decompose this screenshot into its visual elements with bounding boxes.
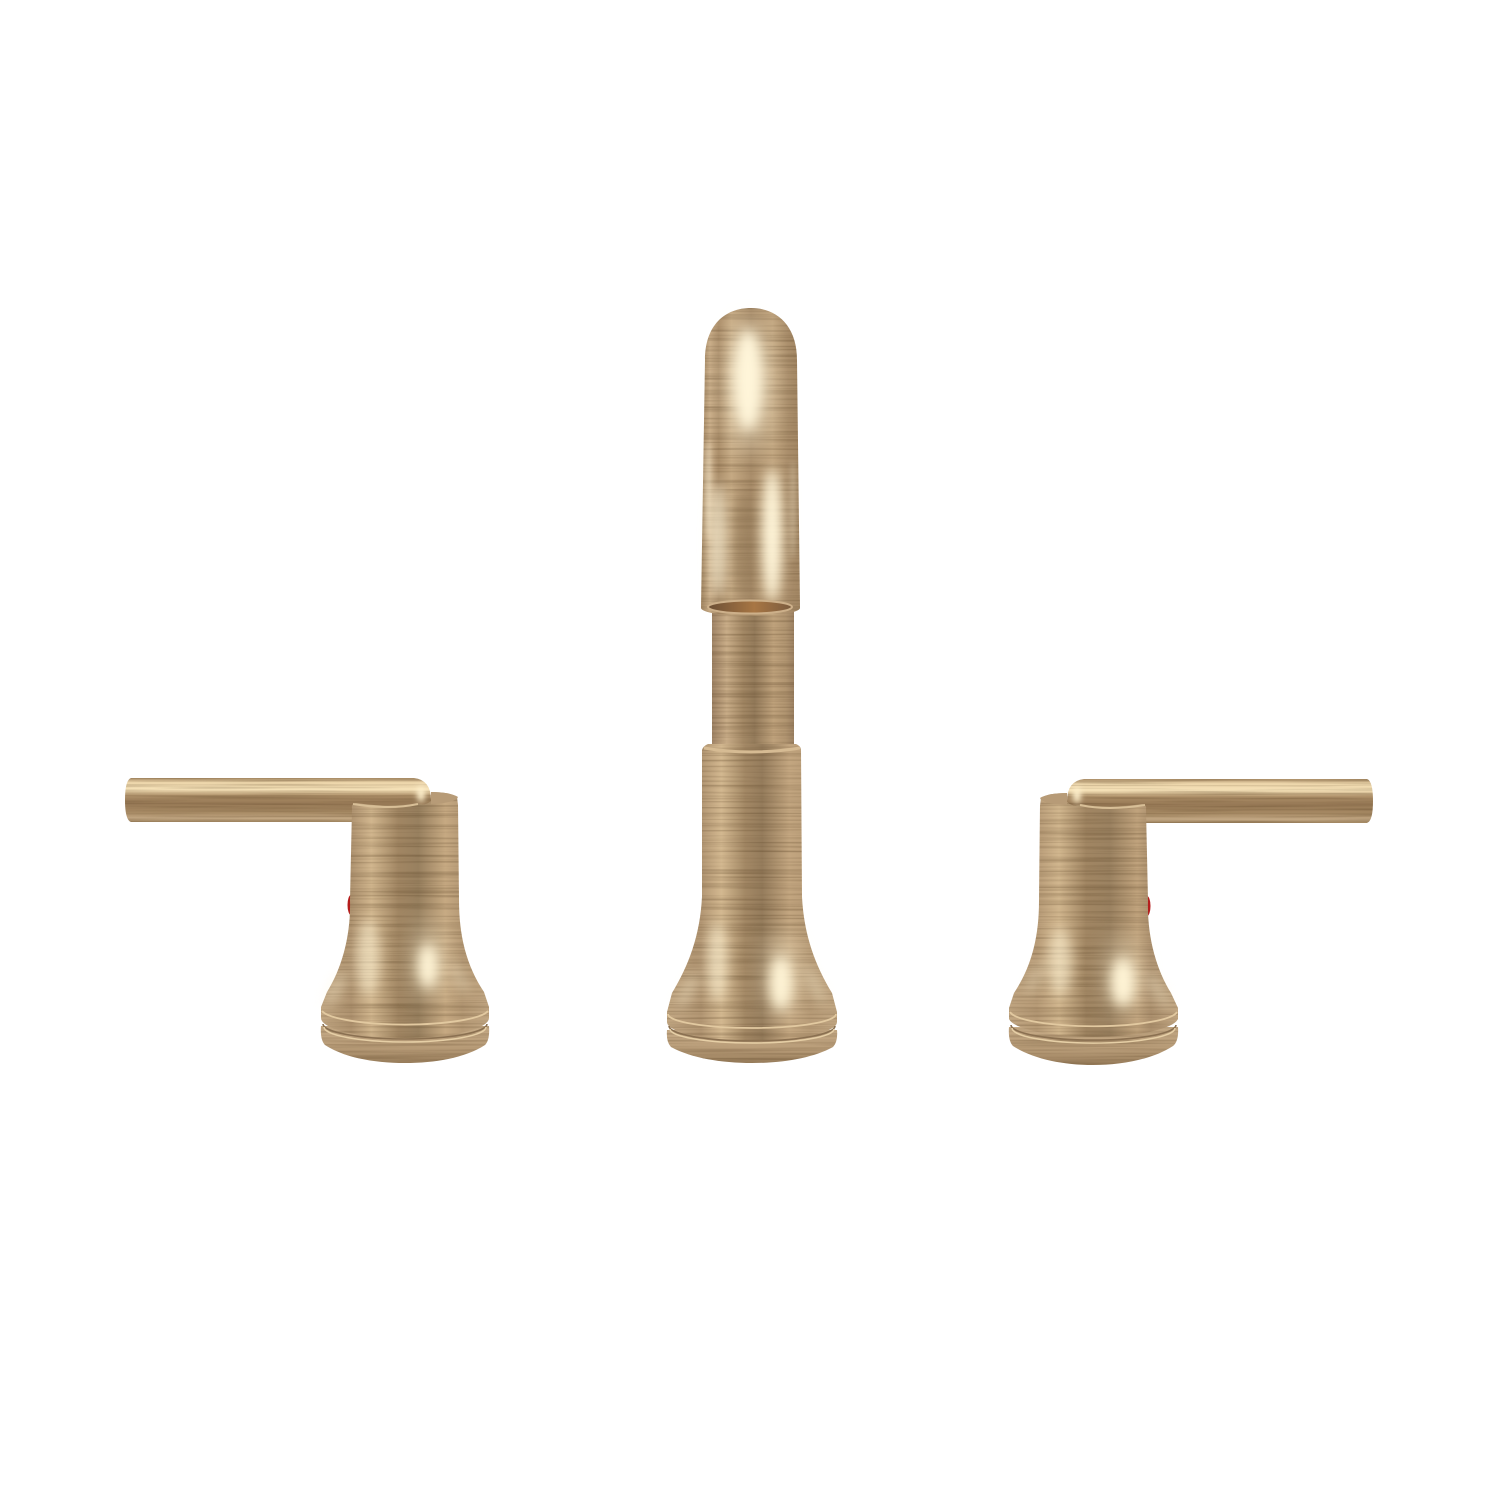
- spout lower shadow: [732, 490, 758, 600]
- left lever: [125, 778, 431, 822]
- right handle metal: [1009, 779, 1373, 1065]
- right lever: [1067, 779, 1373, 823]
- right handle ring lines: [1010, 1012, 1177, 1043]
- left handle metal: [125, 778, 489, 1063]
- curved spout: [701, 308, 800, 616]
- right handle top edge: [1080, 805, 1145, 808]
- spout highlights: [705, 319, 796, 601]
- left lever knob glint: [417, 786, 425, 802]
- left handle: [125, 778, 489, 1063]
- base ring lines: [668, 1014, 836, 1043]
- base stem: [667, 744, 837, 1041]
- left handle top disc: [431, 792, 458, 804]
- left handle top edge: [353, 804, 418, 807]
- right handle hot indicator: [1144, 896, 1150, 916]
- center spout assembly: [667, 308, 837, 1063]
- neck tube: [712, 606, 794, 750]
- spout collar top: [704, 748, 800, 752]
- right handle body: [1009, 793, 1178, 1037]
- left handle lower ring: [321, 1026, 489, 1063]
- right handle top disc: [1040, 793, 1067, 805]
- left handle highlights: [321, 920, 472, 1008]
- right handle lower ring: [1009, 1027, 1178, 1065]
- right lever knob glint: [1073, 787, 1081, 803]
- base highlights: [673, 922, 830, 1017]
- right handle highlights: [1023, 928, 1173, 1013]
- left handle body: [321, 792, 489, 1038]
- spout lower base ring: [667, 1030, 837, 1063]
- spout outlet opening: [708, 600, 792, 614]
- spout metal: [667, 308, 837, 1063]
- left handle hot indicator: [348, 895, 354, 915]
- left handle ring lines: [322, 1011, 488, 1042]
- right handle: [1009, 779, 1373, 1065]
